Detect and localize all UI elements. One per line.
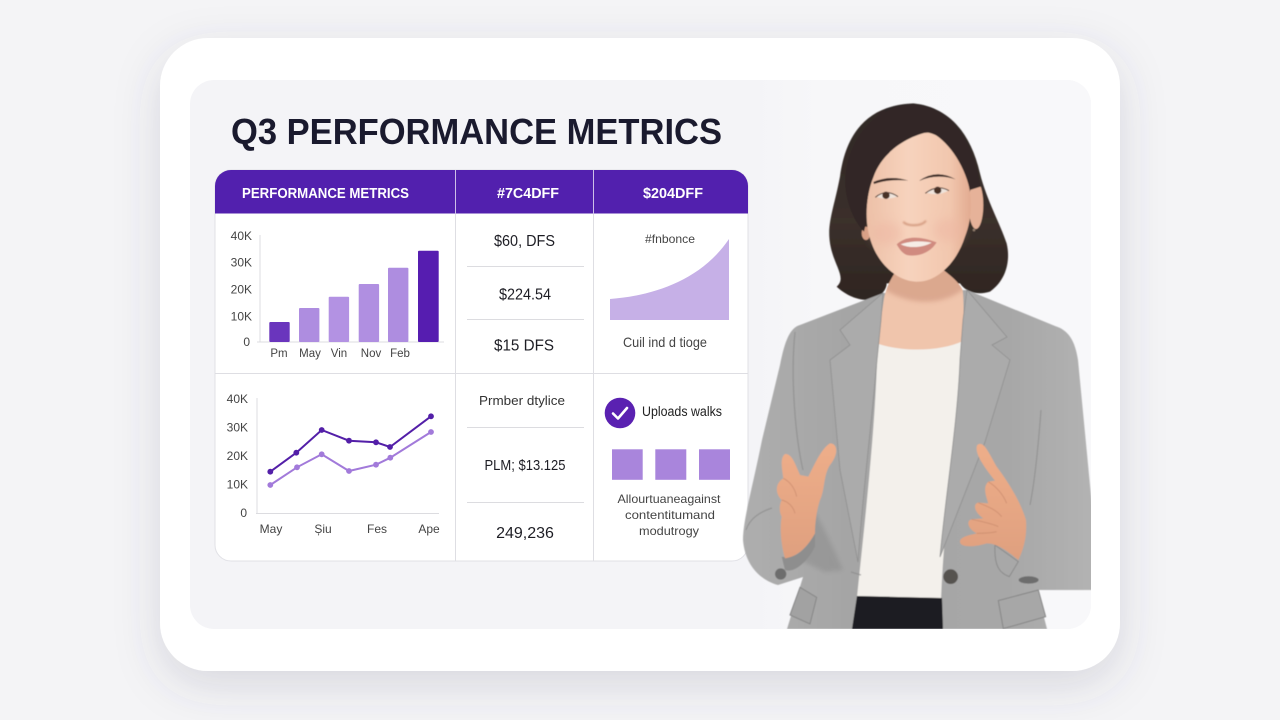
values column: $15 DFS (494, 338, 554, 354)
area chart (610, 232, 729, 350)
hair front and face (850, 132, 984, 282)
bar chart: May (299, 348, 321, 360)
bar chart: 20K (231, 282, 252, 296)
line chart: 10K (227, 478, 248, 492)
values column: 249,236 (496, 525, 554, 542)
jacket buttons (943, 569, 958, 584)
inner slide panel (190, 80, 816, 629)
line chart: May (260, 522, 282, 536)
neck (878, 270, 964, 350)
icon: check badge with label (605, 398, 722, 428)
line chart: Șiu (314, 522, 332, 536)
eyes (875, 187, 949, 199)
line chart: 40K (227, 392, 248, 406)
values column (467, 233, 584, 542)
left cuff (782, 533, 815, 571)
nose (903, 221, 926, 225)
table header: $204DFF (643, 186, 703, 202)
neck shadow (886, 270, 962, 303)
area chart: Cuil ind d tioge (623, 334, 707, 350)
table header: PERFORMANCE METRICS (242, 186, 409, 202)
panel: metrics table (215, 170, 748, 561)
details on lower jacket (775, 443, 1046, 629)
bar chart: Feb (390, 348, 410, 360)
values column: PLM; $13.125 (484, 458, 566, 474)
earring (973, 229, 975, 231)
line chart: 30K (227, 420, 248, 434)
right cuff (995, 545, 1018, 577)
outer white card (160, 38, 1120, 671)
bar chart: 30K (231, 256, 252, 270)
jacket (743, 290, 1095, 629)
caption text (618, 492, 721, 538)
left hand (777, 443, 836, 558)
bar chart: 0 (243, 335, 250, 349)
hair back (829, 103, 1008, 300)
presenter illustration (743, 103, 1095, 629)
caption text: modutrogy (639, 524, 699, 538)
table header (215, 170, 748, 214)
lapels (830, 290, 1010, 562)
title: Q3 PERFORMANCE METRICS (231, 111, 722, 152)
purple squares (612, 449, 730, 480)
values column: $224.54 (499, 286, 551, 304)
line chart (227, 392, 440, 536)
bar chart: Nov (361, 348, 381, 360)
jacket shading (746, 332, 1041, 575)
bar chart: 40K (231, 229, 252, 243)
shirt (857, 341, 963, 600)
values column: $60, DFS (494, 233, 555, 250)
bar chart: Pm (270, 348, 288, 360)
line chart: Fes (367, 522, 387, 536)
brows (873, 178, 908, 184)
pants (852, 596, 943, 629)
caption text: Allourtuaneagainst (618, 492, 721, 506)
line chart: 20K (227, 449, 248, 463)
table header: #7C4DFF (497, 186, 559, 202)
icon: check badge with label: Uploads walks (642, 404, 722, 419)
line chart: 0 (240, 506, 247, 520)
caption text: contentitumand (625, 508, 715, 522)
values column: Prmber dtylice (479, 393, 565, 408)
bar chart (231, 229, 444, 360)
area chart: #fnbonce (645, 232, 695, 246)
pocket flaps (790, 587, 817, 624)
bar chart: Vin (331, 348, 347, 360)
mouth (897, 238, 937, 256)
right hand (960, 444, 1026, 560)
bar chart: 10K (231, 310, 252, 324)
line chart: Ape (418, 522, 440, 536)
finger creases (782, 478, 1007, 533)
